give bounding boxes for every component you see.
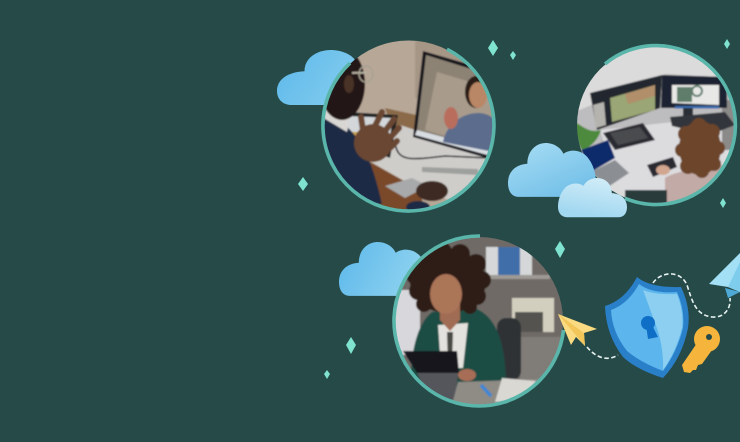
monitor with woman waving [413,51,499,160]
cloud: upper left [277,50,402,105]
hand on keyboard [416,181,448,201]
laptop [581,140,629,187]
tablet [403,351,459,400]
man's body [324,118,382,204]
photo: woman at a desk [577,47,734,202]
tablet [345,112,398,158]
dashed path: yellow plane to shield [587,347,618,358]
woman's curly hair [675,118,725,178]
hand on tablet [458,369,476,381]
photo: woman working on tablet [396,237,563,404]
desk, pen and paper [452,376,538,404]
shelf with binders [486,247,550,279]
right monitor [661,75,727,108]
ring [605,46,735,205]
cloud: small by desk photo [558,178,627,217]
raised hand [354,112,399,162]
sparkles [298,39,730,379]
keyhole [641,316,658,339]
ring [394,236,564,406]
tablet stand [603,123,655,150]
photo circle: video call [316,38,500,214]
face and neck [440,300,460,331]
left monitor [590,75,662,130]
photo circle: woman with tablet [390,232,570,412]
icon: blue paper plane [709,253,740,298]
blouse [438,323,468,368]
photo: man on a video call [324,40,492,210]
dashed path: shield to blue plane [653,274,730,317]
woman's jacket [411,307,506,388]
photo circle: dual monitor desk [570,40,740,210]
plant [575,122,601,150]
icon: security shield [605,277,689,378]
cloud: large by desk photo [508,143,596,197]
keyboard [647,157,677,177]
illustration canvas [277,39,740,408]
ring [323,49,494,211]
chair [497,318,521,380]
woman's hand [656,165,670,175]
icon: gold key [682,326,720,373]
man's head [326,57,366,121]
paper stack and box [512,298,554,332]
woman's top [664,164,722,202]
cloud: lower centre [339,242,429,296]
icon: yellow paper plane [558,314,597,346]
hair [406,242,491,314]
